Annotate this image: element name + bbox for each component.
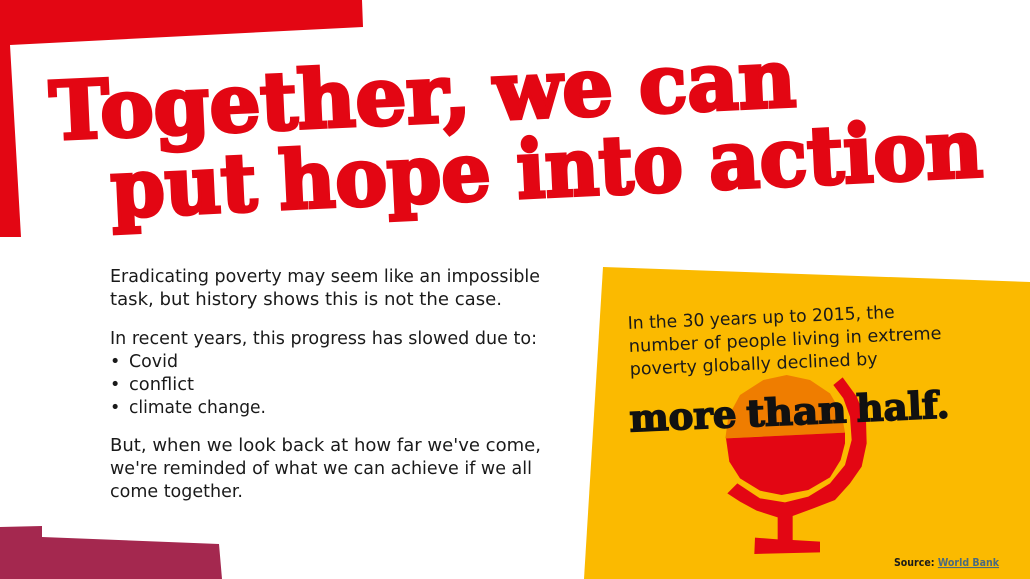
title: hope	[276, 124, 493, 228]
progress slowed list: Covid	[129, 352, 178, 372]
title: put	[108, 135, 259, 236]
statistic text: number of people living in extreme	[628, 324, 942, 357]
panel: statistic callout	[584, 267, 1030, 579]
body text	[110, 267, 541, 502]
progress slowed list: •	[110, 375, 120, 395]
title: into	[514, 115, 685, 217]
plum corner block	[0, 526, 222, 579]
title	[48, 31, 985, 236]
headline figure	[628, 382, 950, 440]
intro paragraph: Eradicating poverty may seem like an impossible	[110, 267, 540, 287]
closing paragraph: we're reminded of what we can achieve if we all	[110, 459, 532, 479]
title: action	[706, 101, 985, 208]
closing paragraph	[110, 436, 541, 502]
progress slowed list	[110, 329, 537, 418]
closing paragraph: But, when we look back at how far we've come,	[110, 436, 541, 456]
progress slowed list: conflict	[129, 375, 194, 395]
progress slowed list: •	[110, 398, 120, 418]
intro paragraph: task, but history shows this is not the case.	[110, 290, 502, 310]
intro paragraph	[110, 267, 540, 310]
closing paragraph: come together.	[110, 482, 243, 502]
title: we	[491, 39, 615, 139]
progress slowed list: climate change.	[129, 398, 266, 418]
title: can	[637, 31, 798, 132]
headline figure: half.	[855, 382, 950, 430]
red corner frame	[0, 0, 363, 237]
title: Together,	[48, 45, 472, 158]
headline figure: than	[745, 387, 847, 435]
progress slowed list: In recent years, this progress has slowed due to:	[110, 329, 537, 349]
headline figure: more	[628, 392, 737, 440]
statistic text: In the 30 years up to 2015, the	[627, 303, 895, 334]
progress slowed list: •	[110, 352, 120, 372]
panel background	[584, 267, 1030, 579]
statistic text: poverty globally declined by	[629, 350, 878, 380]
icon: globe	[725, 375, 867, 554]
source credit: Source: World Bank	[894, 556, 1000, 569]
statistic text	[627, 303, 942, 380]
